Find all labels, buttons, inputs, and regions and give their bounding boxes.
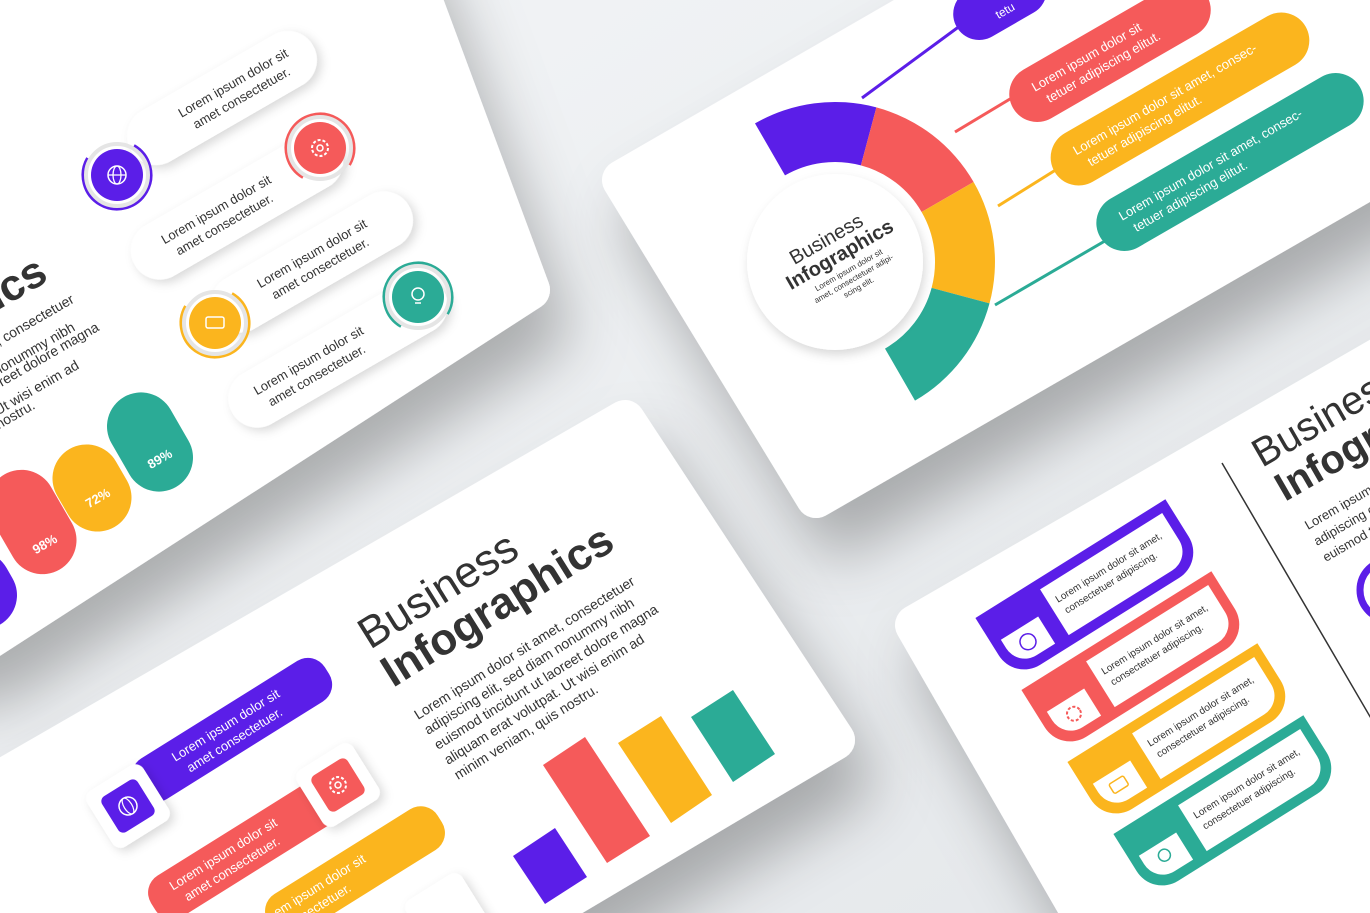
center circle with title: scing elit. xyxy=(842,275,875,300)
pill 1: amet consectetuer. xyxy=(190,64,293,132)
pill: teal: tetuer adipiscing elitut. xyxy=(1131,157,1250,235)
pill: yellow: Lorem ipsum dolor sit amet, consec- xyxy=(1070,40,1259,158)
donut half ring xyxy=(755,102,995,401)
body text xyxy=(411,573,661,783)
slide 1: top-left xyxy=(0,0,530,645)
center circle with title: amet, consectetuer adipi- xyxy=(813,252,895,305)
pill 3: amet consectetuer. xyxy=(269,234,371,302)
pill: purple: Lorem ipsum dolor sit xyxy=(169,686,283,764)
pill 4 xyxy=(218,266,458,438)
pill: teal xyxy=(1086,63,1370,261)
pill: red: amet consectetuer. xyxy=(181,833,283,904)
tab: red: Lorem ipsum dolor sit amet, xyxy=(1100,603,1210,677)
pill: red: tetuer adipiscing elitut. xyxy=(1043,28,1163,106)
center circle with title: Business xyxy=(786,210,867,269)
icon: bulb xyxy=(372,251,464,343)
pill 1: Lorem ipsum dolor sit xyxy=(176,45,291,120)
pill 4: amet consectetuer. xyxy=(265,341,368,409)
pill: yellow xyxy=(1040,2,1320,196)
pill: red: Lorem ipsum dolor sit xyxy=(1029,19,1144,94)
center circle with title: Lorem ipsum dolor sit xyxy=(813,247,885,293)
slide 2: top-right donut xyxy=(622,0,1370,498)
tab: teal: consectetuer adipiscing. xyxy=(1201,766,1298,832)
tab: purple: Lorem ipsum dolor sit amet, xyxy=(1054,531,1164,605)
title: Infographics xyxy=(372,515,622,696)
body text: euismod tincidunt ut laoreet dolore magna xyxy=(431,601,661,753)
slide 3: bottom-center xyxy=(0,420,835,913)
pill: purple: tetu xyxy=(993,0,1017,22)
icon: chat xyxy=(169,277,261,369)
tab: purple xyxy=(975,499,1205,681)
bar chart: pills: 98% xyxy=(30,531,60,557)
slide 4: bottom-right xyxy=(915,334,1370,913)
pill: red: Lorem ipsum dolor sit xyxy=(166,815,280,893)
body text: adipiscing elit, sed diam nonummy nibh xyxy=(421,594,637,738)
body text fragment xyxy=(0,291,102,447)
pill: yellow xyxy=(257,799,453,913)
tab: teal: Lorem ipsum dolor sit amet, xyxy=(1192,747,1302,821)
body text: Lorem ipsum dolor sit amet, consectetuer xyxy=(411,573,638,723)
pill: purple xyxy=(944,0,1056,50)
bar chart: pills xyxy=(0,380,205,642)
pill: yellow: tetuer adipiscing elitut. xyxy=(1085,92,1204,169)
icon partial circle xyxy=(1360,560,1370,620)
icon: globe xyxy=(71,129,163,221)
pill 3 xyxy=(201,181,423,343)
icon: gear square xyxy=(293,740,383,830)
center circle with title xyxy=(747,174,923,350)
tab: red xyxy=(1021,571,1251,753)
tab: red: consectetuer adipiscing. xyxy=(1109,622,1206,688)
tab: teal xyxy=(1113,715,1343,897)
tab: purple: consectetuer adipiscing. xyxy=(1063,550,1160,616)
pill 2: amet consectetuer. xyxy=(173,190,276,258)
connector lines xyxy=(862,20,1110,305)
body text: aliquam erat volutpat. Ut wisi enim ad xyxy=(441,631,647,768)
center circle with title: Infographics xyxy=(783,215,897,295)
pill 2: Lorem ipsum dolor sit xyxy=(158,172,274,247)
pill 2 xyxy=(120,122,354,290)
body text: minim veniam, quis nostru. xyxy=(451,681,601,783)
body text fragment xyxy=(1302,465,1370,565)
tab: yellow: consectetuer adipiscing. xyxy=(1155,694,1252,760)
bar chart: pills: 72% xyxy=(83,485,113,511)
pill: red xyxy=(141,759,369,913)
tab: yellow: Lorem ipsum dolor sit amet, xyxy=(1146,675,1256,749)
tab: yellow xyxy=(1067,643,1297,825)
icon: square partial xyxy=(402,870,492,913)
icon: gear xyxy=(274,102,366,194)
title: Business xyxy=(349,522,527,658)
bar chart xyxy=(513,690,775,904)
pill: red xyxy=(999,0,1221,132)
pill 4: Lorem ipsum dolor sit xyxy=(251,323,366,398)
pill: purple: amet consectetuer. xyxy=(184,704,285,775)
pill: teal: Lorem ipsum dolor sit amet, consec- xyxy=(1116,106,1305,224)
bar chart: pills: 89% xyxy=(145,446,175,472)
pill 3: Lorem ipsum dolor sit xyxy=(254,216,370,291)
pill: purple xyxy=(124,650,340,810)
pill 1 xyxy=(117,20,327,176)
icon: globe square xyxy=(83,761,173,851)
